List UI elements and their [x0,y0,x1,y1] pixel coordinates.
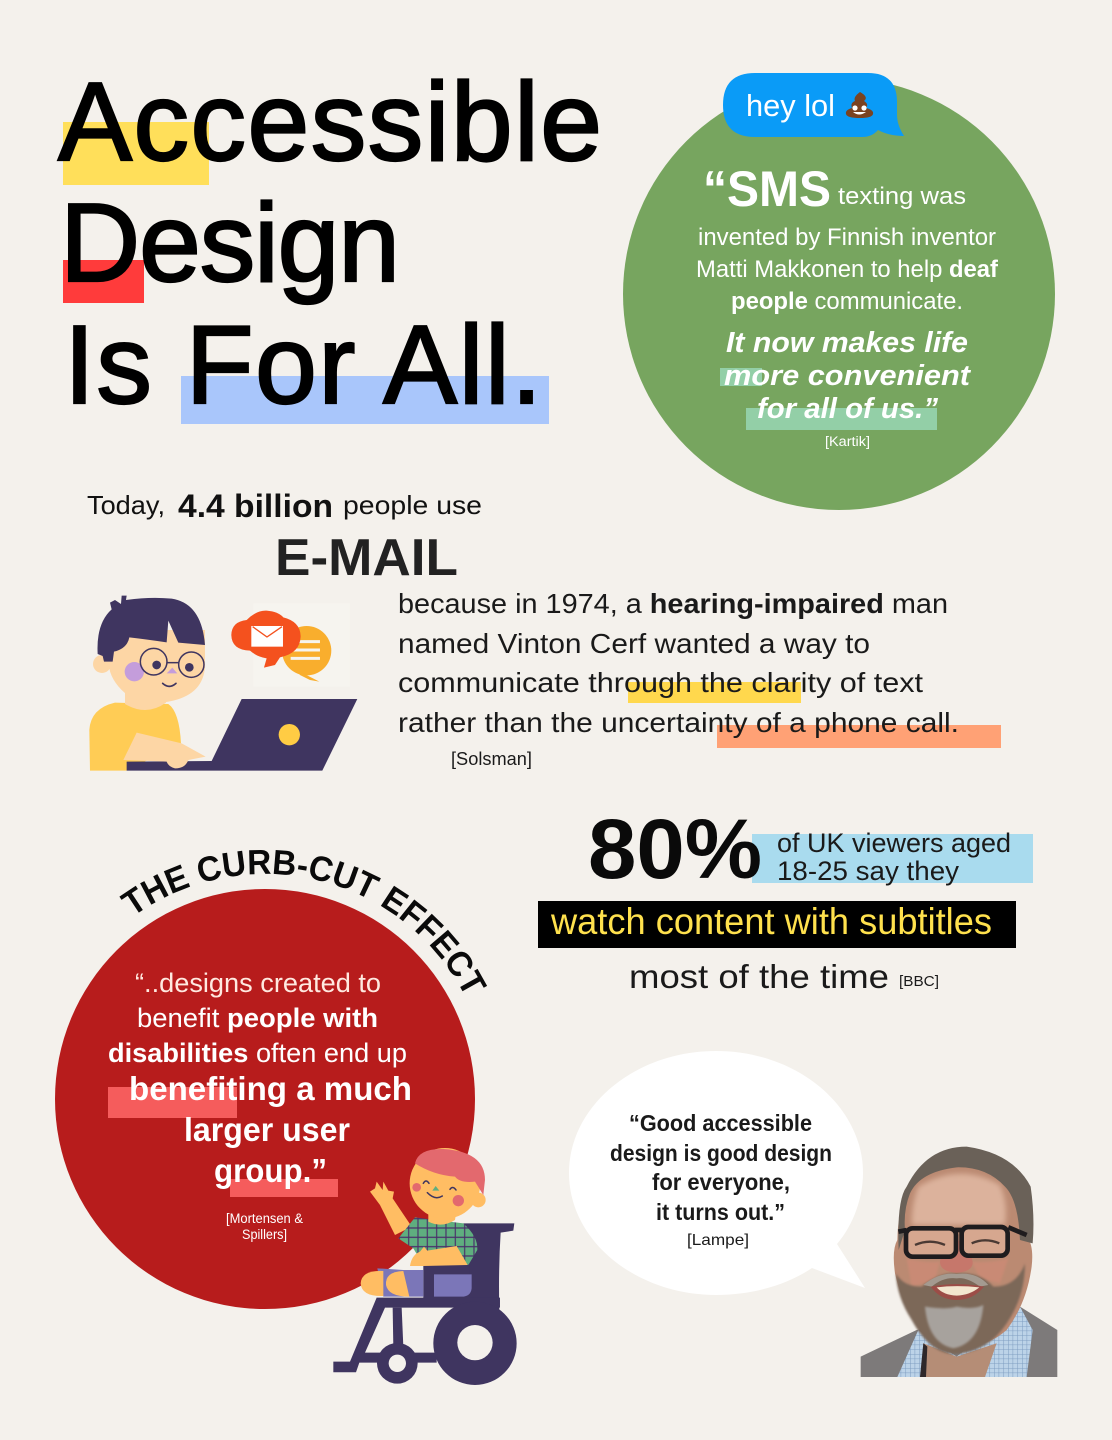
email heading: Today, [87,490,165,520]
SMS quote text: people communicate. [731,288,963,315]
body text: email history: rather than the uncertainty of a phone call. [398,707,959,738]
highlights [628,682,1001,748]
SMS quote text: Matti Makkonen to help deaf [696,256,999,283]
speech bubble: Lampe quote: [Lampe] [687,1232,749,1249]
panel: curb-cut circle [55,889,475,1309]
chat bubble: hey lol [723,73,904,137]
curb-cut quote: disabilities often end up [108,1038,407,1068]
SMS quote text: texting was [838,183,966,210]
speech bubble: Lampe quote: it turns out.” [656,1199,785,1225]
statistic: 80 percent [538,802,1033,995]
email heading: people use [343,490,482,520]
body text: email history: because in 1974, a hearing-impaired man [398,588,948,619]
speech bubble: Lampe quote [569,1051,865,1295]
email heading: E-MAIL [275,529,458,587]
SMS quote text: “SMS [703,161,831,217]
illustration: person at laptop [89,596,357,771]
title: Accessible [58,60,602,184]
curb-cut quote: group.” [214,1152,327,1189]
highlights [720,368,937,430]
statistic: 80 percent: of UK viewers aged [777,828,1011,858]
body text: email history: [Solsman] [451,749,532,769]
SMS quote text [696,161,999,449]
chat bubble: hey lol: hey lol [746,88,835,123]
speech bubble: Lampe quote: design is good design [610,1140,832,1166]
statistic: 80 percent: 80% [588,802,762,896]
curb-cut quote: benefit people with [137,1003,378,1033]
curb-cut quote: larger user [184,1111,350,1148]
body text: email history [398,588,1001,769]
portrait of Lampe [861,1147,1057,1377]
body text: email history: communicate through the clarity of text [398,667,923,698]
illustration: child in wheelchair [333,1148,517,1385]
curb-cut quote: [Mortensen & [226,1211,303,1226]
curb-cut quote [108,968,412,1242]
title: Is For All. [64,303,542,427]
email heading [87,488,482,587]
statistic: 80 percent: most of the time [629,958,889,995]
body text: email history: named Vinton Cerf wanted a way to [398,628,870,659]
title: Design [60,181,400,305]
highlights [108,1087,338,1197]
SMS quote text: It now makes life [726,327,968,359]
speech bubble: Lampe quote: for everyone, [652,1169,790,1195]
SMS quote text: more convenient [724,360,971,392]
statistic: 80 percent: 18-25 say they [777,856,960,886]
curb-cut quote: “..designs created to [135,968,381,998]
SMS quote text: for all of us.” [757,393,939,425]
speech bubble: Lampe quote: “Good accessible [629,1110,812,1136]
icon: poop emoji [846,92,873,118]
curb-cut quote: benefiting a much [129,1070,412,1107]
icon: message bubbles [231,611,331,682]
curb-cut quote: Spillers] [242,1227,287,1242]
statistic: 80 percent: [BBC] [899,973,939,990]
title [58,60,602,427]
email heading: 4.4 billion [178,488,333,524]
SMS quote text: [Kartik] [825,434,870,449]
curved heading: the curb-cut effect: THE CURB-CUT EFFECT [120,850,488,992]
panel: SMS quote circle [623,78,1055,510]
statistic: 80 percent: watch content with subtitles [550,901,992,942]
SMS quote text: invented by Finnish inventor [698,224,996,251]
